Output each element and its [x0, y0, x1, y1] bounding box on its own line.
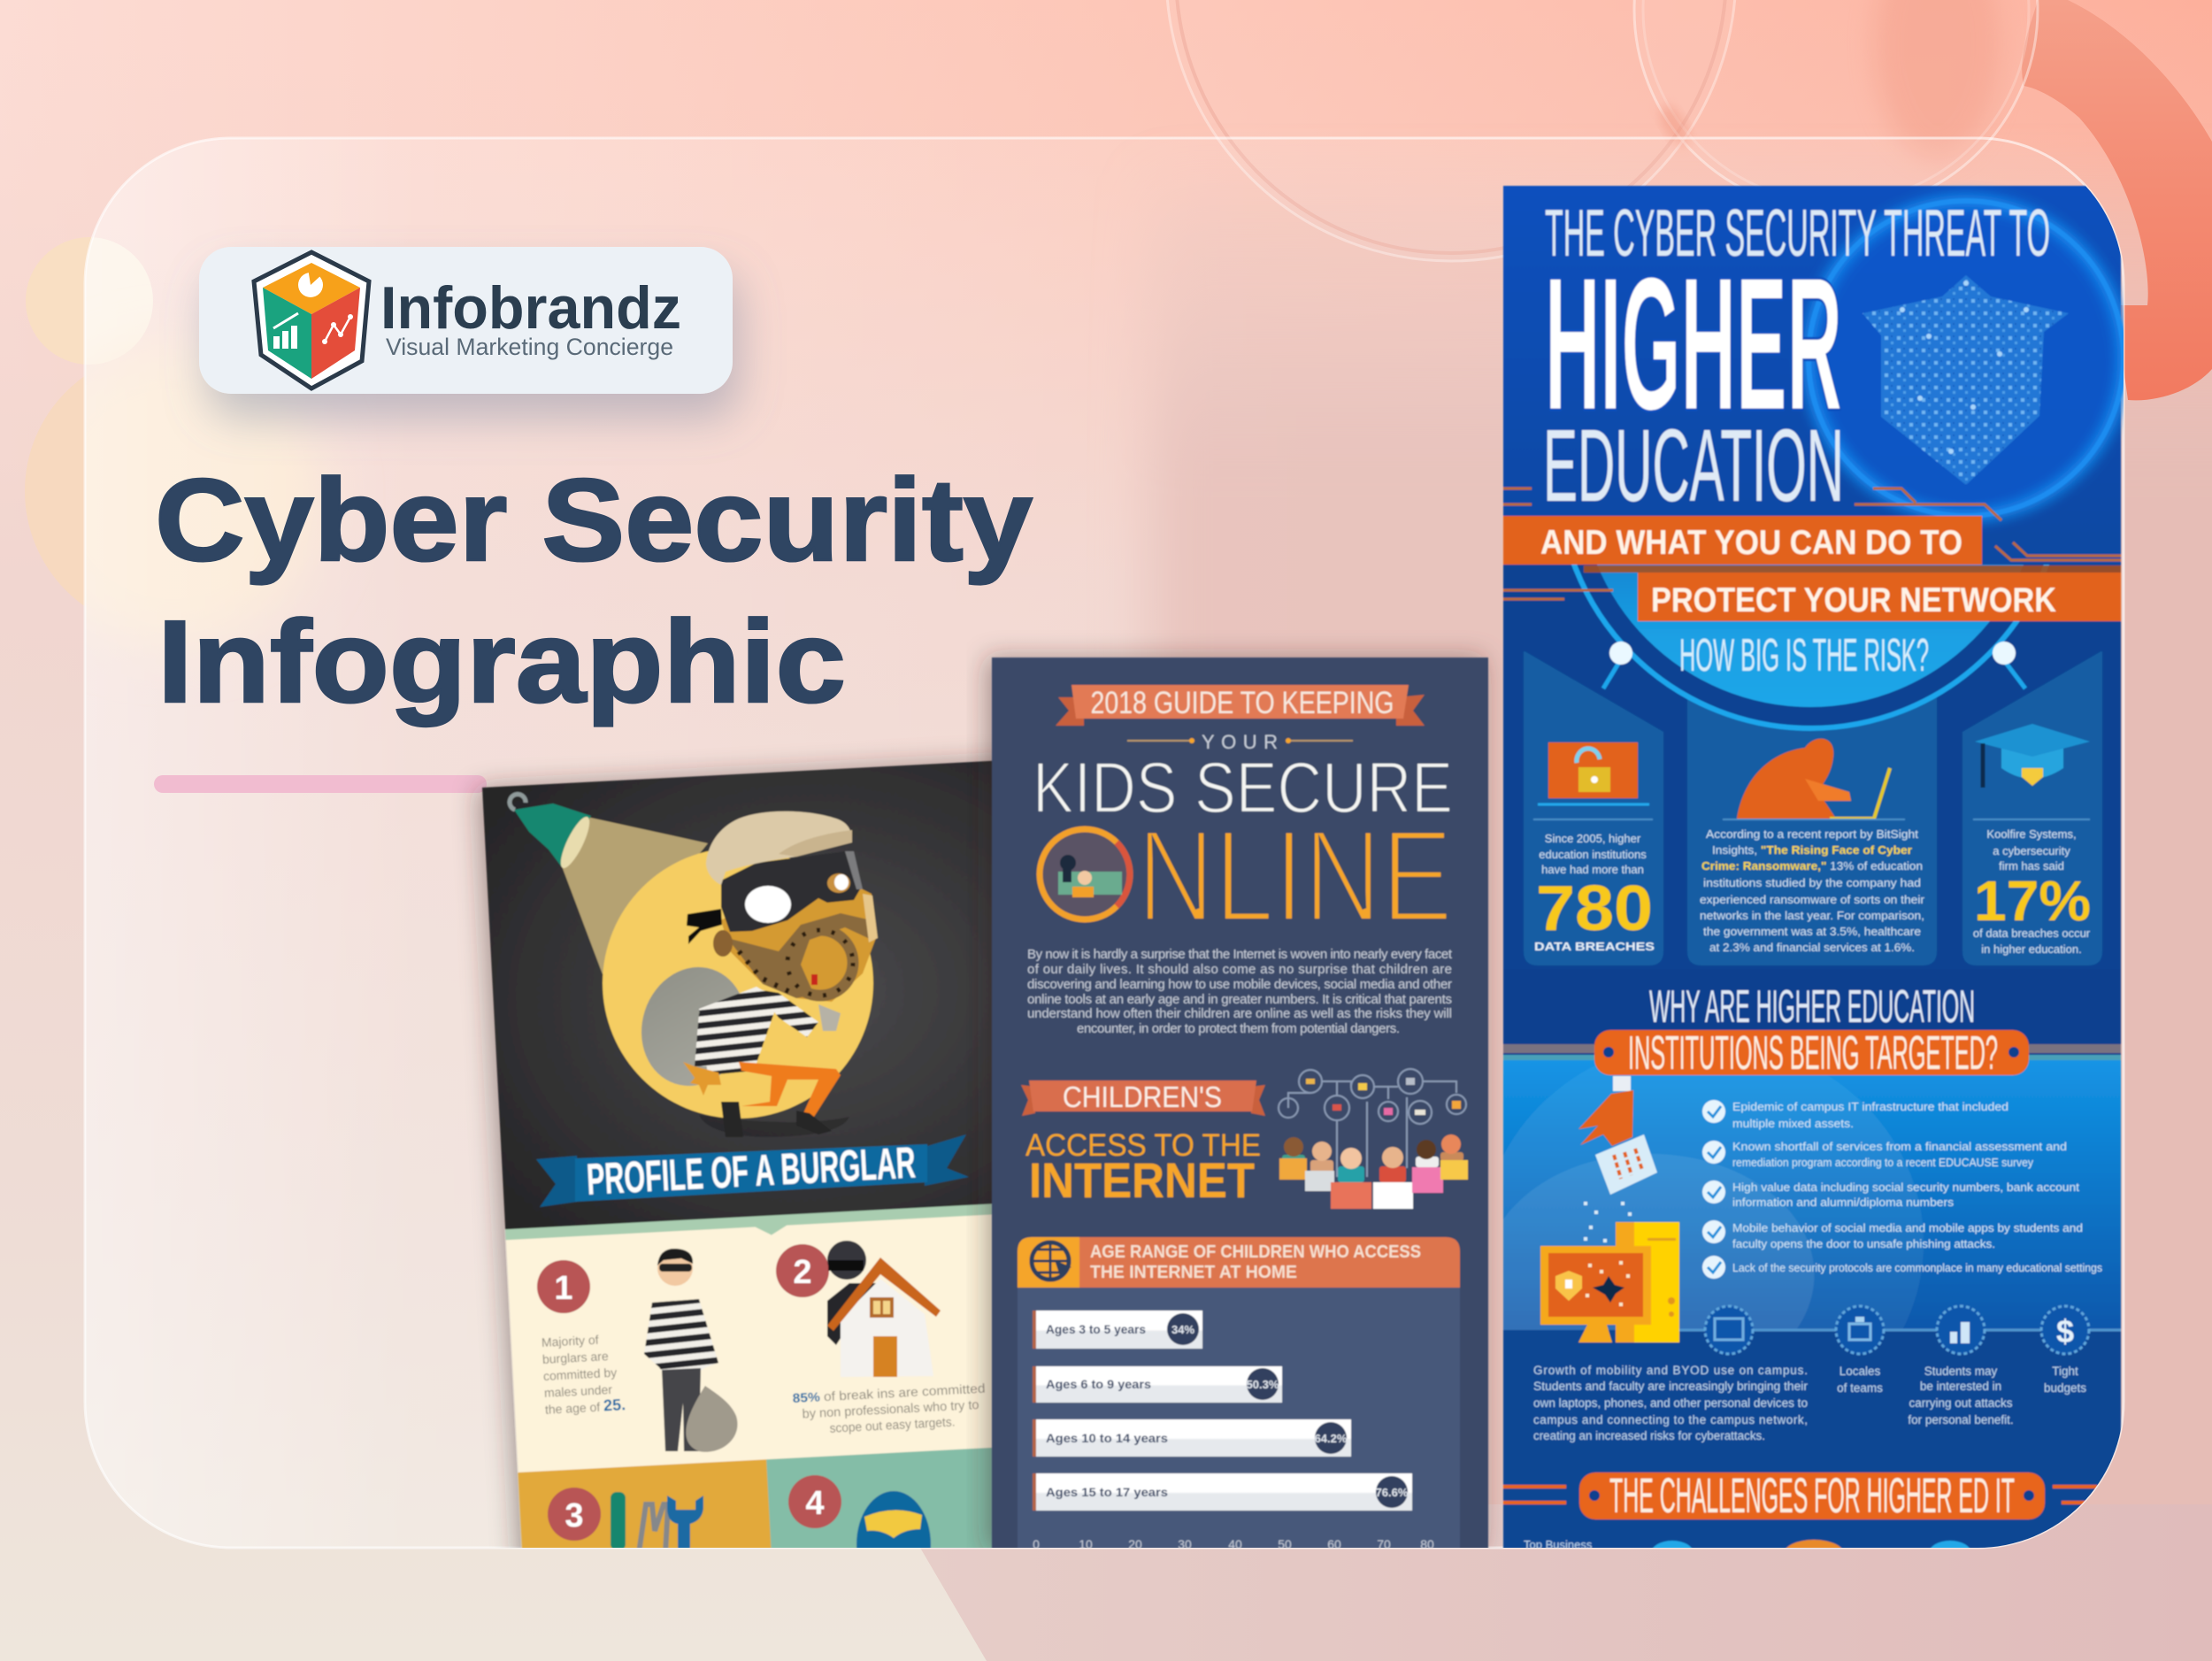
poster: cyber security threat to higher education: HOW BIG IS THE RISK? — [1679, 630, 1929, 681]
circuit traces — [1503, 488, 2121, 560]
step 3: tools: 3 — [565, 1497, 584, 1534]
ribbon: profile of a burglar: PROFILE OF A BURGLAR — [586, 1138, 917, 1204]
ribbon: children's: CHILDREN'S — [1063, 1080, 1222, 1113]
paragraph: growth of mobility: Growth of mobility and BYOD use on campus. — [1533, 1364, 1808, 1377]
caption: locales of teams: Locales — [1839, 1365, 1881, 1378]
checklist: Epidemic of campus IT infrastructure that included — [1732, 1100, 2008, 1113]
caption: tight budgets: budgets — [2044, 1381, 2086, 1395]
why section background — [1503, 969, 2121, 1556]
ribbon: profile of a burglar — [536, 1134, 969, 1207]
risk column: graduation cap: 17% — [1974, 869, 2091, 933]
chart axis — [1033, 1537, 1434, 1551]
checklist: Lack of the security protocols are commonplace in many educational settings — [1732, 1261, 2102, 1274]
step 2: burglar behind house: by non professionals who try to — [802, 1398, 979, 1421]
poster: kids secure online — [992, 657, 1488, 1553]
step 1: burglar with sack: the age of 25. — [544, 1396, 626, 1418]
heading: internet: INTERNET — [1029, 1152, 1255, 1208]
chart plot area — [1018, 1288, 1460, 1553]
posters clipped by card — [482, 186, 2124, 1597]
caption: students: Students may — [1924, 1365, 1998, 1378]
poster: profile of a burglar — [462, 745, 993, 1548]
bar: ages 3 to 5 — [1033, 1311, 1202, 1349]
risk column: data breaches: DATA BREACHES — [1534, 940, 1655, 953]
risk column: hacker report — [1687, 696, 1937, 965]
paragraph: growth of mobility — [1533, 1364, 1809, 1442]
icon: parent and child in O — [1040, 829, 1130, 919]
title — [155, 455, 1033, 727]
chart: age range of children — [1018, 1237, 1460, 1553]
step 1: burglar with sack: Majority of — [541, 1333, 599, 1350]
step 4: ski mask: 4 — [805, 1485, 825, 1522]
risk column: graduation cap: Koolfire Systems, — [1986, 827, 2077, 841]
chart axis: 10 — [1079, 1537, 1093, 1551]
checklist: Mobile behavior of social media and mobile apps by students and — [1732, 1221, 2083, 1234]
risk column: hacker report: the government was at 3.5%, healthcare — [1703, 925, 1921, 938]
risk column: hacker report: Crime: Ransomware," 13% of education — [1701, 859, 1923, 873]
timeline with four icons: $ — [2056, 1313, 2074, 1350]
logo wordmark: Infobrandz — [380, 274, 681, 342]
bar: ages 6 to 9: 50.3% — [1247, 1378, 1279, 1391]
caption: students: carrying out attacks — [1909, 1396, 2013, 1410]
poster sheet — [992, 657, 1488, 1551]
risk column: data breaches: Since 2005, higher — [1545, 832, 1641, 845]
side traces — [1503, 590, 1613, 599]
bar: ages 3 to 5: Ages 3 to 5 years — [1046, 1322, 1146, 1336]
risk column: hacker report: Insights, "The Rising Face of Cyber — [1712, 843, 1912, 857]
risk column: graduation cap: in higher education. — [1981, 942, 2082, 956]
risk column: data breaches: education institutions — [1539, 848, 1647, 861]
bar: ages 6 to 9 — [1033, 1366, 1282, 1403]
risk column: graduation cap: of data breaches occur — [1973, 927, 2091, 940]
bar: ages 6 to 9: Ages 6 to 9 years — [1046, 1377, 1151, 1391]
risk column: hacker report: networks in the last year. For comparison, — [1700, 909, 1924, 922]
step 1: burglar with sack: committed by — [543, 1365, 618, 1383]
bar: ages 10 to 14 — [1033, 1419, 1351, 1457]
chart axis: 60 — [1327, 1537, 1341, 1551]
checklist — [1702, 1100, 2102, 1279]
checklist: High value data including social security numbers, bank account — [1732, 1180, 2079, 1194]
orange banner: and what you can do to: AND WHAT YOU CAN DO TO — [1540, 524, 1962, 562]
bar: ages 10 to 14: 64.2% — [1315, 1432, 1348, 1445]
caption: tight budgets — [2044, 1365, 2086, 1395]
caption: students: for personal benefit. — [1908, 1413, 2014, 1426]
ribbon: children's — [1021, 1080, 1265, 1116]
step 4: ski mask — [787, 1474, 932, 1548]
risk column: graduation cap: a cybersecurity — [1993, 844, 2070, 857]
step 1: burglar with sack: burglars are — [542, 1349, 609, 1366]
paragraph: growth of mobility: own laptops, phones, and other personal devices to — [1533, 1396, 1808, 1410]
risk column: data breaches: 780 — [1536, 873, 1653, 944]
bar: ages 10 to 14: Ages 10 to 14 years — [1046, 1431, 1168, 1445]
bowl nodes — [1603, 642, 2025, 688]
illustration: children with laptops — [1279, 1069, 1468, 1209]
chart axis: 50 — [1278, 1537, 1292, 1551]
intro paragraph: of our daily lives. It should also come as no surprise that children are — [1027, 962, 1452, 977]
caption: locales of teams: of teams — [1837, 1381, 1883, 1395]
step 1: burglar with sack — [537, 1249, 738, 1452]
chart axis: 70 — [1377, 1537, 1391, 1551]
decorative ring top right — [2022, 0, 2212, 400]
caption: locales of teams — [1837, 1365, 1883, 1395]
paragraph: growth of mobility: creating an increased risks for cyberattacks. — [1533, 1429, 1765, 1442]
logo card — [199, 247, 733, 394]
step 3: tools — [547, 1487, 704, 1548]
risk bowl and ring — [1558, 224, 2062, 728]
lamp and light beam — [510, 795, 708, 974]
timeline with four icons — [1679, 1306, 2121, 1354]
caption: tight budgets: Tight — [2052, 1365, 2078, 1378]
risk column: data breaches: have had more than — [1541, 863, 1644, 876]
heading: online: NLINE — [1137, 802, 1453, 950]
decorative peach circles, sharp outside the card — [25, 237, 91, 605]
chart axis: 40 — [1228, 1537, 1242, 1551]
poster: cyber security threat to higher education — [1503, 186, 2124, 1568]
checklist: multiple mixed assets. — [1732, 1117, 1854, 1130]
your divider — [1127, 731, 1353, 753]
spotlight circle — [603, 848, 873, 1119]
intro paragraph — [1027, 947, 1453, 1036]
orange banner: protect your network — [1584, 565, 2121, 621]
shield glow ring — [1809, 201, 2124, 516]
chart axis: 20 — [1128, 1537, 1142, 1551]
risk column: graduation cap: firm has said — [1999, 859, 2064, 873]
intro paragraph: By now it is hardly a surprise that the Internet is woven into nearly every facet — [1027, 947, 1453, 962]
logo icon: cube — [254, 252, 369, 388]
poster sheet — [1503, 186, 2121, 1553]
pink underline — [154, 775, 487, 793]
icon: network shield — [1863, 275, 2069, 485]
ribbon: 2018 guide: 2018 GUIDE TO KEEPING — [1090, 686, 1394, 720]
step 2: burglar behind house — [776, 1241, 987, 1438]
checklist: remediation program according to a recent EDUCAUSE survey — [1732, 1156, 2033, 1169]
orange pill: institutions being targeted — [1594, 1027, 2029, 1080]
risk column: hacker report: institutions studied by the company had — [1703, 876, 1921, 889]
chart axis: 80 — [1420, 1537, 1434, 1551]
paragraph: growth of mobility: Students and faculty are increasingly bringing their — [1533, 1380, 1809, 1393]
heading: kids secure: KIDS SECURE — [1033, 748, 1453, 828]
intro paragraph: online tools at an early age and in greater numbers. It is critical that parents — [1027, 992, 1452, 1007]
bar: ages 15 to 17: 76.6% — [1376, 1486, 1409, 1499]
step 1: burglar with sack: males under — [544, 1382, 613, 1400]
intro paragraph: discovering and learning how to use mobile devices, social media and other — [1027, 977, 1452, 992]
chart header: AGE RANGE OF CHILDREN WHO ACCESS — [1090, 1242, 1421, 1262]
burglar character — [626, 811, 878, 1137]
risk column: data breaches — [1524, 651, 1663, 965]
bar: ages 15 to 17: Ages 15 to 17 years — [1046, 1485, 1168, 1499]
caption: students: be interested in — [1920, 1380, 2001, 1393]
chart axis: 0 — [1033, 1537, 1040, 1551]
checklist: Known shortfall of services from a financial assessment and — [1732, 1140, 2067, 1153]
risk column: hacker report: According to a recent report by BitSight — [1706, 827, 1918, 841]
chart header — [1018, 1237, 1460, 1288]
risk column: graduation cap — [1962, 651, 2102, 965]
heading: access to the: ACCESS TO THE — [1025, 1128, 1261, 1163]
illustration: hand dropping document onto computer — [1540, 1076, 1679, 1342]
bar: ages 15 to 17 — [1033, 1473, 1412, 1511]
step 2: burglar behind house: 2 — [793, 1254, 812, 1291]
poster sheet — [462, 745, 993, 1548]
next section peek — [1524, 1538, 1971, 1568]
risk section dark background — [1503, 565, 2121, 972]
orange pill: the challenges for higher ed it — [1503, 1467, 2097, 1523]
logo tagline: Visual Marketing Concierge — [386, 334, 673, 360]
title: Infographic — [157, 596, 846, 727]
chart axis: 30 — [1178, 1537, 1192, 1551]
checklist: faculty opens the door to unsafe phishing attacks. — [1732, 1237, 1995, 1250]
paragraph: growth of mobility: campus and connecting to the campus network, — [1533, 1413, 1808, 1426]
step 1: burglar with sack: 1 — [554, 1270, 573, 1307]
step 2: burglar behind house: scope out easy targets. — [829, 1415, 956, 1436]
intro paragraph: encounter, in order to protect them from potential dangers. — [1077, 1021, 1400, 1036]
decorative bubbles — [1166, 0, 2038, 261]
title: Cyber Security — [155, 455, 1033, 585]
bar: ages 3 to 5: 34% — [1171, 1323, 1194, 1336]
chart header: THE INTERNET AT HOME — [1090, 1263, 1297, 1282]
orange banner: and what you can do to — [1503, 516, 1982, 565]
risk column: hacker report: experienced ransomware of sorts on their — [1700, 893, 1925, 906]
intro paragraph: understand how often their children are online as well as the risks they will — [1027, 1006, 1452, 1021]
next section peek: Top Business — [1524, 1538, 1593, 1551]
risk column: hacker report: at 2.3% and financial services at 1.6%. — [1709, 941, 1915, 954]
checklist: information and alumni/diploma numbers — [1732, 1196, 1955, 1209]
caption: students — [1908, 1365, 2014, 1426]
your divider: YOUR — [1202, 731, 1278, 753]
step 2: burglar behind house: 85% of break ins are committed — [792, 1382, 986, 1406]
heading: education: EDUCATION — [1543, 408, 1844, 523]
orange banner: protect your network: PROTECT YOUR NETWORK — [1651, 581, 2056, 619]
